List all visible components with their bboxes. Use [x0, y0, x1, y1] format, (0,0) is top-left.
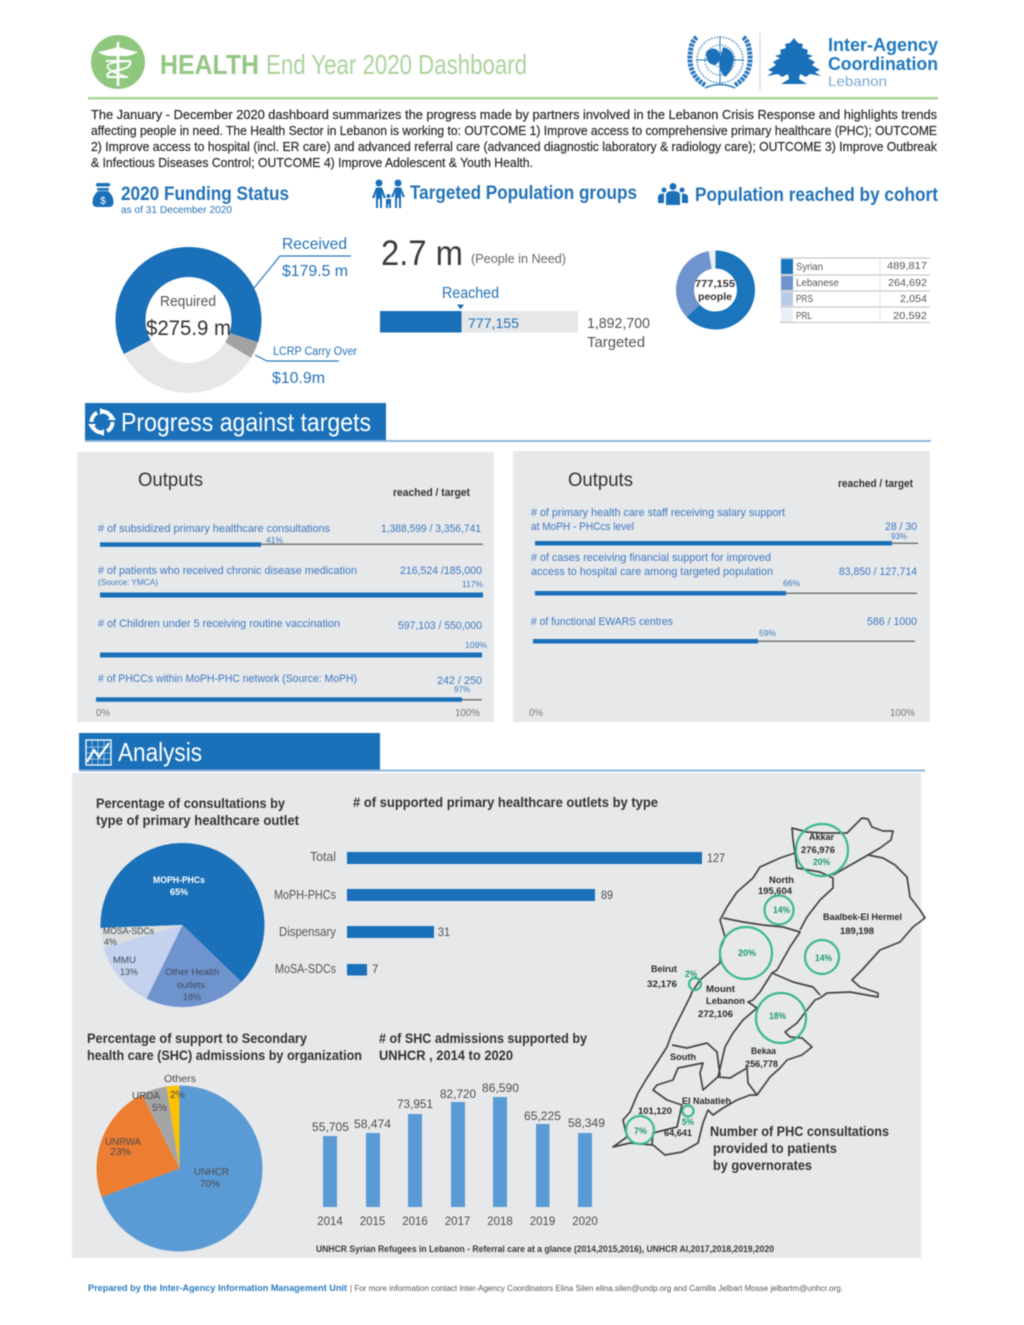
map labels: 20% [813, 857, 830, 867]
map caption: provided to patients [713, 1141, 837, 1156]
map: Lebanon governorates [613, 818, 925, 1155]
heading: Targeted Population groups [410, 183, 637, 204]
progress row: chronic medication: (Source: YMCA) [98, 577, 158, 587]
progress row: salary support [531, 507, 918, 546]
heading: 2020 Funding Status [121, 184, 289, 205]
axis labels [529, 708, 915, 719]
heading: SHC admissions: UNHCR , 2014 to 2020 [379, 1048, 513, 1063]
callout: received: $179.5 m [282, 263, 348, 280]
icon: family [372, 180, 405, 208]
source note: UNHCR Syrian Refugees in Lebanon - Referral care at a glance (2014,2015,2016), UNHCR AI,2017,2018,2019,2020 [316, 1244, 774, 1254]
pie labels: consultations [103, 875, 219, 1002]
intro text: affecting people in need. The Health Sector in Lebanon is working to: OUTCOME 1) Improve access to comprehensive primary healthcare (PHC); OUTCOME [91, 124, 937, 138]
reached bar [380, 285, 578, 332]
progress row: financial support [531, 552, 917, 596]
cohort table: Lebanese [796, 277, 839, 289]
bar chart: SHC admissions by year: 73,951 [397, 1099, 433, 1111]
map labels: 272,106 [698, 1009, 733, 1020]
pie labels: consultations: MOPH-PHCs [153, 875, 205, 885]
heading: Outputs [138, 470, 203, 491]
people in need [381, 234, 566, 273]
bar chart: outlets by type [274, 850, 725, 976]
heading: Population reached by cohort [695, 185, 939, 206]
progress row: chronic medication: 117% [462, 580, 483, 589]
map labels: El Nabatieh [682, 1096, 731, 1107]
map labels: 14% [773, 905, 790, 915]
progress row: consultations: # of subsidized primary healthcare consultations [98, 523, 330, 535]
map labels: 32,176 [647, 979, 677, 990]
heading: Progress against targets [121, 407, 371, 437]
donut centre label: Required [160, 293, 216, 310]
heading: consultations pie: Percentage of consultations by [96, 796, 285, 811]
pie labels: SHC admissions [105, 1073, 229, 1190]
panel: outputs right [513, 451, 930, 722]
map labels: 189,198 [840, 926, 874, 937]
panel: funding status [92, 183, 357, 398]
pie labels: consultations: 4% [104, 937, 117, 947]
bar chart: SHC admissions by year: 2015 [360, 1216, 385, 1228]
heading: Analysis [118, 737, 202, 767]
logo text: Inter-Agency [828, 35, 938, 55]
cohort table: 489,817 [887, 260, 927, 272]
progress row: consultations: 1,388,599 / 3,356,741 [381, 523, 481, 535]
icon: caduceus [91, 35, 145, 89]
callout: received: Received [282, 236, 347, 253]
people in need: 2.7 m [381, 234, 463, 273]
map labels: Beirut [651, 964, 678, 975]
logo text: Coordination [828, 54, 938, 74]
donut chart: funding [110, 242, 267, 398]
title: HEALTH [160, 49, 259, 80]
progress row: vaccination: 109% [465, 641, 487, 650]
bar chart: SHC admissions by year: 2014 [317, 1216, 343, 1228]
icon: money bag [92, 183, 114, 207]
map labels: 276,976 [801, 845, 835, 856]
cohort table: 20,592 [893, 310, 927, 322]
bar chart: SHC admissions by year: 2020 [572, 1216, 598, 1228]
progress row: salary support: at MoPH - PHCcs level [531, 521, 634, 533]
map caption: Number of PHC consultations [710, 1124, 889, 1139]
map labels: 20% [738, 948, 756, 958]
pie labels: consultations: Other Health [165, 967, 219, 977]
icon: money bag: $ [100, 196, 106, 207]
logo text: Lebanon [828, 73, 887, 89]
panel: population reached by cohort [658, 183, 939, 333]
intro text [91, 108, 938, 170]
panel: analysis [72, 773, 925, 1258]
progress row: salary support: 93% [891, 532, 907, 541]
progress row: vaccination: # of Children under 5 receiving routine vaccination [98, 618, 340, 630]
progress row: vaccination [98, 618, 487, 658]
map labels: 101,120 [638, 1106, 672, 1117]
heading: consultations pie [96, 796, 299, 828]
progress row: consultations [98, 523, 483, 547]
pie labels: SHC admissions: UNRWA [105, 1136, 141, 1148]
progress row: vaccination: 597,103 / 550,000 [398, 620, 482, 632]
heading: SHC admissions [379, 1031, 587, 1063]
targeted total: Targeted [587, 334, 645, 351]
pie labels: consultations: MOSA-SDCs [103, 926, 154, 936]
bar chart: SHC admissions by year: 65,225 [524, 1111, 561, 1123]
pie labels: consultations: MMU [113, 955, 136, 965]
panel: targeted population [372, 180, 650, 351]
intro text: & Infectious Diseases Control; OUTCOME 4) Improve Adolescent & Youth Health. [91, 156, 533, 170]
pie labels: SHC admissions: 2% [170, 1089, 185, 1101]
progress row: salary support: 28 / 30 [885, 521, 917, 533]
icon: group of people [658, 183, 688, 205]
bar chart: SHC admissions by year [312, 1083, 605, 1228]
bar chart: SHC admissions by year: 55,705 [312, 1122, 349, 1134]
heading: outlets by type: # of supported primary healthcare outlets by type [353, 795, 658, 810]
progress row: EWARS: 59% [759, 629, 776, 638]
map labels: 5% [682, 1117, 694, 1127]
bar chart: SHC admissions by year: 2019 [530, 1216, 555, 1228]
bar chart: outlets by type: 31 [438, 927, 450, 939]
donut centre label: $275.9 m [146, 317, 231, 340]
pie labels: SHC admissions: URDA [132, 1090, 160, 1102]
bar chart: SHC admissions by year: 82,720 [440, 1089, 476, 1101]
axis labels: 0% [529, 708, 543, 719]
icon: cedar tree [767, 38, 821, 84]
pie chart: SHC admissions [124, 1113, 235, 1224]
column label: reached / target [838, 478, 913, 490]
bar chart: outlets by type: Total [310, 850, 336, 864]
footer: | For more information contact Inter-Agency Coordinators Elina Silen elina.silen@undp.org and Camilla Jelbart Mosse jelbartm@unhcr.org. [350, 1284, 843, 1293]
pie labels: consultations: outlets [177, 980, 206, 990]
people in need: (People in Need) [471, 251, 566, 266]
progress row: EWARS: 586 / 1000 [867, 616, 917, 628]
bar chart: SHC admissions by year: 2016 [402, 1216, 428, 1228]
axis labels [96, 708, 480, 719]
map labels: Mount [706, 984, 736, 995]
footer: Prepared by the Inter-Agency Information Management Unit [88, 1283, 348, 1294]
progress row: chronic medication: 216,524 /185,000 [400, 565, 482, 577]
bar chart: SHC admissions by year: 2017 [445, 1216, 470, 1228]
map circles [626, 824, 848, 1144]
cohort table [780, 258, 930, 322]
cohort table: 264,692 [888, 277, 927, 289]
subtitle: End Year 2020 Dashboard [266, 49, 527, 80]
bar chart: outlets by type: 89 [601, 890, 613, 902]
progress row: financial support: # of cases receiving financial support for improved [531, 552, 771, 564]
bar chart: SHC admissions by year: 86,590 [482, 1083, 519, 1095]
bar chart: SHC admissions by year: 58,474 [354, 1119, 392, 1131]
axis labels: 0% [96, 708, 110, 719]
axis labels: 100% [455, 708, 480, 719]
progress row: EWARS: # of functional EWARS centres [531, 616, 673, 628]
pie labels: SHC admissions: UNHCR [194, 1166, 229, 1178]
footer [88, 1283, 843, 1294]
map labels: Bekaa [751, 1046, 777, 1057]
pie labels: consultations: 13% [120, 967, 138, 977]
donut centre label: 777,155 [695, 278, 735, 290]
progress row: EWARS [531, 616, 917, 644]
map caption [710, 1124, 889, 1173]
logo text [828, 35, 938, 89]
donut centre label [146, 293, 231, 340]
section banner: progress against targets [85, 403, 931, 442]
section banner: analysis [79, 733, 925, 772]
bar chart: SHC admissions by year: 2018 [487, 1216, 513, 1228]
progress row: chronic medication: # of patients who received chronic disease medication [98, 565, 357, 577]
cohort table: 2,054 [900, 293, 927, 305]
targeted total [587, 315, 650, 351]
callout: received [254, 236, 351, 288]
icon: chart [86, 740, 111, 765]
header [91, 33, 938, 90]
callout: carry over: $10.9m [272, 370, 325, 387]
panel: outputs left [77, 452, 494, 722]
map labels: Lebanon [706, 996, 745, 1007]
donut centre label: people [698, 291, 732, 303]
bar chart: outlets by type: 127 [707, 853, 725, 865]
date note: as of 31 December 2020 [121, 205, 232, 216]
map labels: 195,604 [758, 886, 793, 897]
reached bar: Reached [442, 285, 499, 302]
cohort table: PRS [796, 293, 813, 305]
icon: circular arrows [88, 408, 116, 436]
intro text: The January - December 2020 dashboard summarizes the progress made by partners involved in the Lebanon Crisis Response and highlights trends [91, 108, 937, 122]
heading: SHC admissions: # of SHC admissions supported by [379, 1031, 587, 1046]
pie labels: SHC admissions: 70% [200, 1178, 220, 1190]
cohort table: Syrian [796, 261, 823, 273]
map labels: North [769, 875, 794, 886]
heading: consultations pie: type of primary healthcare outlet [96, 813, 299, 828]
bar chart: outlets by type: Dispensary [279, 925, 337, 939]
reached bar: 777,155 [468, 315, 519, 331]
map labels: 14% [815, 953, 832, 963]
map labels: 2% [685, 969, 697, 979]
progress row: PHCCs [96, 673, 482, 702]
bar chart: outlets by type: MoSA-SDCs [275, 962, 336, 976]
progress row: PHCCs: # of PHCCs within MoPH-PHC network (Source: MoPH) [98, 673, 357, 685]
map labels: Baalbek-El Hermel [823, 912, 902, 923]
axis labels: 100% [890, 708, 915, 719]
map labels: 7% [634, 1126, 647, 1136]
progress row: chronic medication [98, 565, 483, 598]
pie labels: SHC admissions: 5% [152, 1102, 167, 1114]
bar chart: outlets by type: MoPH-PHCs [274, 888, 336, 902]
map labels: 18% [769, 1011, 786, 1021]
heading: SHC pie [87, 1031, 362, 1063]
progress row: salary support: # of primary health care staff receiving salary support [531, 507, 785, 519]
progress row: financial support: 83,850 / 127,714 [839, 566, 917, 578]
map labels: Akkar [809, 832, 834, 843]
map labels [634, 832, 902, 1139]
progress row: financial support: 66% [783, 579, 800, 588]
pie labels: consultations: 65% [170, 887, 188, 897]
pie chart: consultations [125, 867, 240, 983]
donut centre label [695, 278, 735, 303]
donut chart: cohort [672, 247, 759, 333]
callout: carry over [255, 346, 357, 387]
pie labels: SHC admissions: 23% [110, 1146, 131, 1158]
heading: SHC pie: health care (SHC) admissions by organization [87, 1048, 362, 1063]
map caption: by governorates [713, 1158, 812, 1173]
intro text: 2) Improve access to hospital (incl. ER care) and advanced referral care (advanced diagnostic laboratory & radiology care); OUTCOME 3) Improve Outbreak [91, 140, 938, 154]
icon: UN emblem [690, 36, 750, 88]
column label: reached / target [393, 487, 470, 499]
progress row: consultations: 41% [266, 536, 283, 545]
progress row: PHCCs: 242 / 250 [437, 675, 482, 687]
targeted total: 1,892,700 [587, 315, 650, 332]
bar chart: outlets by type: 7 [372, 964, 378, 976]
callout: carry over: LCRP Carry Over [273, 346, 357, 358]
map labels: South [670, 1052, 696, 1063]
heading: Outputs [568, 470, 633, 491]
cohort table: PRL [796, 310, 812, 322]
pie labels: SHC admissions: Others [164, 1073, 196, 1085]
progress row: PHCCs: 97% [454, 685, 470, 694]
bar chart: SHC admissions by year: 58,349 [568, 1118, 605, 1130]
heading: SHC pie: Percentage of support to Secondary [87, 1031, 307, 1046]
map labels: 256,778 [745, 1059, 778, 1070]
map labels: 64,641 [664, 1128, 693, 1139]
pie labels: consultations: 18% [183, 992, 201, 1002]
progress row: financial support: access to hospital care among targeted population [531, 566, 773, 578]
